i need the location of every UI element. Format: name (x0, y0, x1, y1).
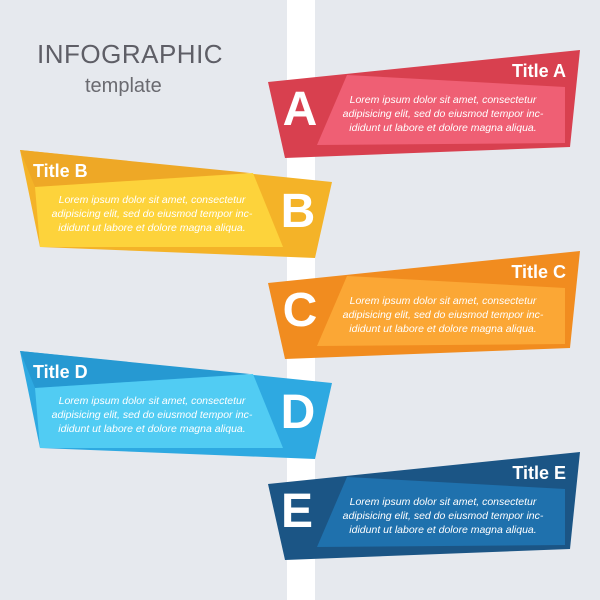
panel: D: ididunt ut labore et dolore magna aliqua. (58, 423, 246, 435)
panel: B: adipisicing elit, sed do eiusmod tempor inc- (52, 208, 253, 220)
panel: A: Lorem ipsum dolor sit amet, consectetur (350, 94, 537, 106)
panel: D (20, 351, 332, 459)
panel: D: Lorem ipsum dolor sit amet, consectetur (59, 395, 246, 407)
panel: B: B (281, 185, 315, 238)
panel: B (20, 150, 332, 258)
panel: A: A (283, 83, 317, 136)
panel: E: ididunt ut labore et dolore magna aliqua. (349, 524, 537, 536)
panel: A: adipisicing elit, sed do eiusmod tempor inc- (343, 108, 544, 120)
panel: E: adipisicing elit, sed do eiusmod tempor inc- (343, 510, 544, 522)
panel: D: D (281, 386, 315, 439)
panel: A (268, 50, 580, 158)
panel: A: Title A (512, 61, 566, 81)
panel: C: Lorem ipsum dolor sit amet, consectetur (350, 295, 537, 307)
title (37, 39, 223, 97)
panel: E: Title E (512, 463, 566, 483)
panel: E (268, 452, 580, 560)
panel: C: C (283, 284, 317, 337)
panel: B: ididunt ut labore et dolore magna aliqua. (58, 222, 246, 234)
panel: E: Lorem ipsum dolor sit amet, consectetur (350, 496, 537, 508)
panel: B: Title B (33, 161, 88, 181)
panel: A: ididunt ut labore et dolore magna aliqua. (349, 122, 537, 134)
title: template (85, 75, 162, 97)
panel: C (268, 251, 580, 359)
panel: C: adipisicing elit, sed do eiusmod tempor inc- (343, 309, 544, 321)
title: INFOGRAPHIC (37, 39, 223, 69)
panel: C: ididunt ut labore et dolore magna aliqua. (349, 323, 537, 335)
panel: D: Title D (33, 362, 88, 382)
panel: D: adipisicing elit, sed do eiusmod tempor inc- (52, 409, 253, 421)
panel: E: E (281, 485, 313, 538)
panel: B: Lorem ipsum dolor sit amet, consectetur (59, 194, 246, 206)
panel: C: Title C (511, 262, 566, 282)
